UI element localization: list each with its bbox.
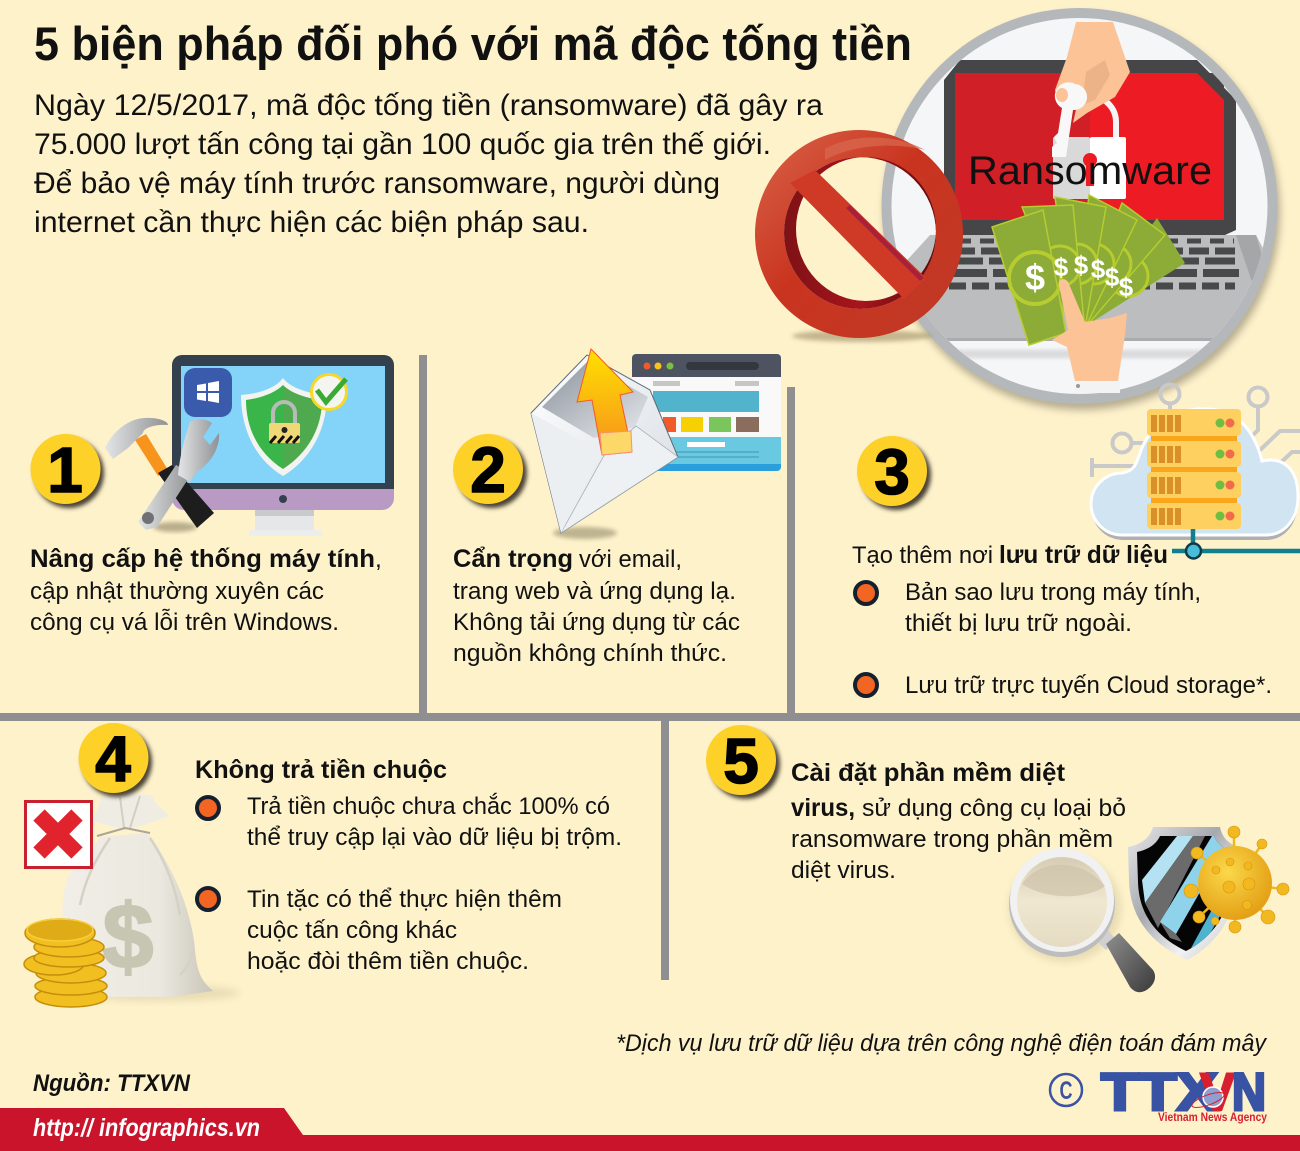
text: backup heading <box>852 541 1168 569</box>
logo: TTXVN: TTX <box>1101 1063 1218 1122</box>
number 1 <box>30 434 104 508</box>
icon: virus <box>1184 826 1289 933</box>
panel 1: upgrade system <box>30 355 394 636</box>
text: upgrade system <box>30 545 382 636</box>
bullet: local backup <box>855 579 1201 637</box>
intro text: internet cần thực hiện các biện pháp sau. <box>34 206 589 239</box>
logo: TTXVN: Vietnam News Agency <box>1158 1112 1268 1124</box>
icon: money bag: $ <box>102 886 154 988</box>
no entry sign <box>755 130 963 342</box>
intro text: 75.000 lượt tấn công tại gần 100 quốc gia trên thế giới. <box>34 128 771 161</box>
text: careful: nguồn không chính thức. <box>453 640 727 667</box>
panel 5: antivirus <box>706 725 1289 992</box>
number 5: 5 <box>723 725 759 797</box>
footnote: *Dịch vụ lưu trữ dữ liệu dựa trên công nghệ điện toán đám mây <box>616 1030 1268 1057</box>
bullet: no guarantee: thể truy cập lại vào dữ liệu bị trộm. <box>247 824 622 851</box>
ransomware laptop illustration <box>860 8 1300 410</box>
banknotes: $ <box>1054 252 1069 282</box>
banknotes: $ <box>1074 250 1089 280</box>
logo: TTXVN: N <box>1232 1063 1266 1122</box>
text: upgrade system: cập nhật thường xuyên các <box>30 578 324 605</box>
number 2: 2 <box>470 434 506 506</box>
text: careful: Cẩn trọng <box>453 545 573 573</box>
text: antivirus: diệt virus. <box>791 857 896 884</box>
bullet: no guarantee: Trả tiền chuộc chưa chắc 100% có <box>247 793 610 820</box>
intro text: Để bảo vệ máy tính trước ransomware, người dùng <box>34 167 720 200</box>
bullet: further attacks: cuộc tấn công khác <box>247 917 457 944</box>
text: careful <box>453 545 740 667</box>
banknotes: $ <box>1119 272 1134 302</box>
number 4: 4 <box>95 723 131 795</box>
logo: TTXVN: V <box>1200 1063 1235 1122</box>
text: upgrade system: công cụ vá lỗi trên Windows. <box>30 609 339 636</box>
number 4 <box>78 723 152 797</box>
text: antivirus: ransomware trong phần mềm <box>791 826 1113 853</box>
icon: magnifying glass <box>1009 848 1155 992</box>
number 3 <box>857 436 931 510</box>
hand with money <box>1052 279 1127 393</box>
intro text: Ngày 12/5/2017, mã độc tống tiền (ransomware) đã gây ra <box>34 89 823 122</box>
icon: shield <box>1128 827 1236 960</box>
bullet: further attacks <box>197 886 562 975</box>
bullet: local backup: thiết bị lưu trữ ngoài. <box>905 610 1132 637</box>
icon: money bag <box>62 794 240 1001</box>
icon: monitor with shield <box>172 355 394 536</box>
divider lines <box>0 355 1300 980</box>
text: antivirus: virus, <box>791 794 855 822</box>
banknotes: $ <box>1025 257 1045 298</box>
bullet: local backup: Bản sao lưu trong máy tính, <box>905 579 1201 606</box>
bullet: cloud storage: Lưu trữ trực tuyến Cloud storage*. <box>905 672 1272 699</box>
number 5 <box>706 725 780 799</box>
padlock <box>1053 96 1126 199</box>
text: upgrade system: Nâng cấp hệ thống máy tính <box>30 545 375 573</box>
text: careful: trang web và ứng dụng lạ. <box>453 578 736 605</box>
logo: TTXVN <box>1050 1063 1268 1124</box>
panel 2: careful with email <box>453 349 781 667</box>
text: heading: Không trả tiền chuộc <box>195 756 447 784</box>
icon: gold coins <box>24 919 107 1007</box>
text: backup heading: Tạo thêm nơi <box>852 542 993 569</box>
intro text <box>34 89 823 239</box>
banknotes: $ <box>1091 254 1106 284</box>
icon: red X box <box>26 802 92 868</box>
text: antivirus <box>791 759 1126 884</box>
logo: TTXVN: C <box>1060 1077 1072 1105</box>
title: 5 biện pháp đối phó với mã độc tống tiền <box>34 17 912 70</box>
panel 4: do not pay ransom <box>24 723 622 1007</box>
panel 3: data backup <box>852 384 1300 699</box>
number 1: 1 <box>47 434 83 506</box>
number 3: 3 <box>874 436 910 508</box>
bullet: further attacks: hoặc đòi thêm tiền chuộc. <box>247 948 529 975</box>
icon: web browser <box>632 354 781 471</box>
icon: cloud server <box>1091 384 1300 558</box>
icon: hammer and wrench <box>105 418 219 532</box>
icon: envelope with arrow <box>531 349 678 539</box>
banknotes <box>992 195 1185 345</box>
banknotes: $ <box>1105 262 1120 292</box>
label: Ransomware: Ransomware <box>968 149 1212 193</box>
source: Nguồn: TTXVN <box>33 1070 191 1097</box>
footer banner: http:// infographics.vn <box>33 1114 260 1142</box>
text: careful: Không tải ứng dụng từ các <box>453 609 740 636</box>
hand with key <box>1052 22 1130 157</box>
footer banner <box>0 1108 1300 1151</box>
text: antivirus: Cài đặt phần mềm diệt <box>791 759 1066 787</box>
text: backup heading: lưu trữ dữ liệu <box>999 541 1168 569</box>
text: antivirus: sử dụng công cụ loại bỏ <box>862 795 1126 822</box>
text: upgrade system: , <box>375 546 382 573</box>
number 2 <box>453 434 527 508</box>
bullet: no guarantee <box>197 793 622 851</box>
text: careful: với email, <box>579 546 682 573</box>
bullet: further attacks: Tin tặc có thể thực hiện thêm <box>247 886 562 913</box>
